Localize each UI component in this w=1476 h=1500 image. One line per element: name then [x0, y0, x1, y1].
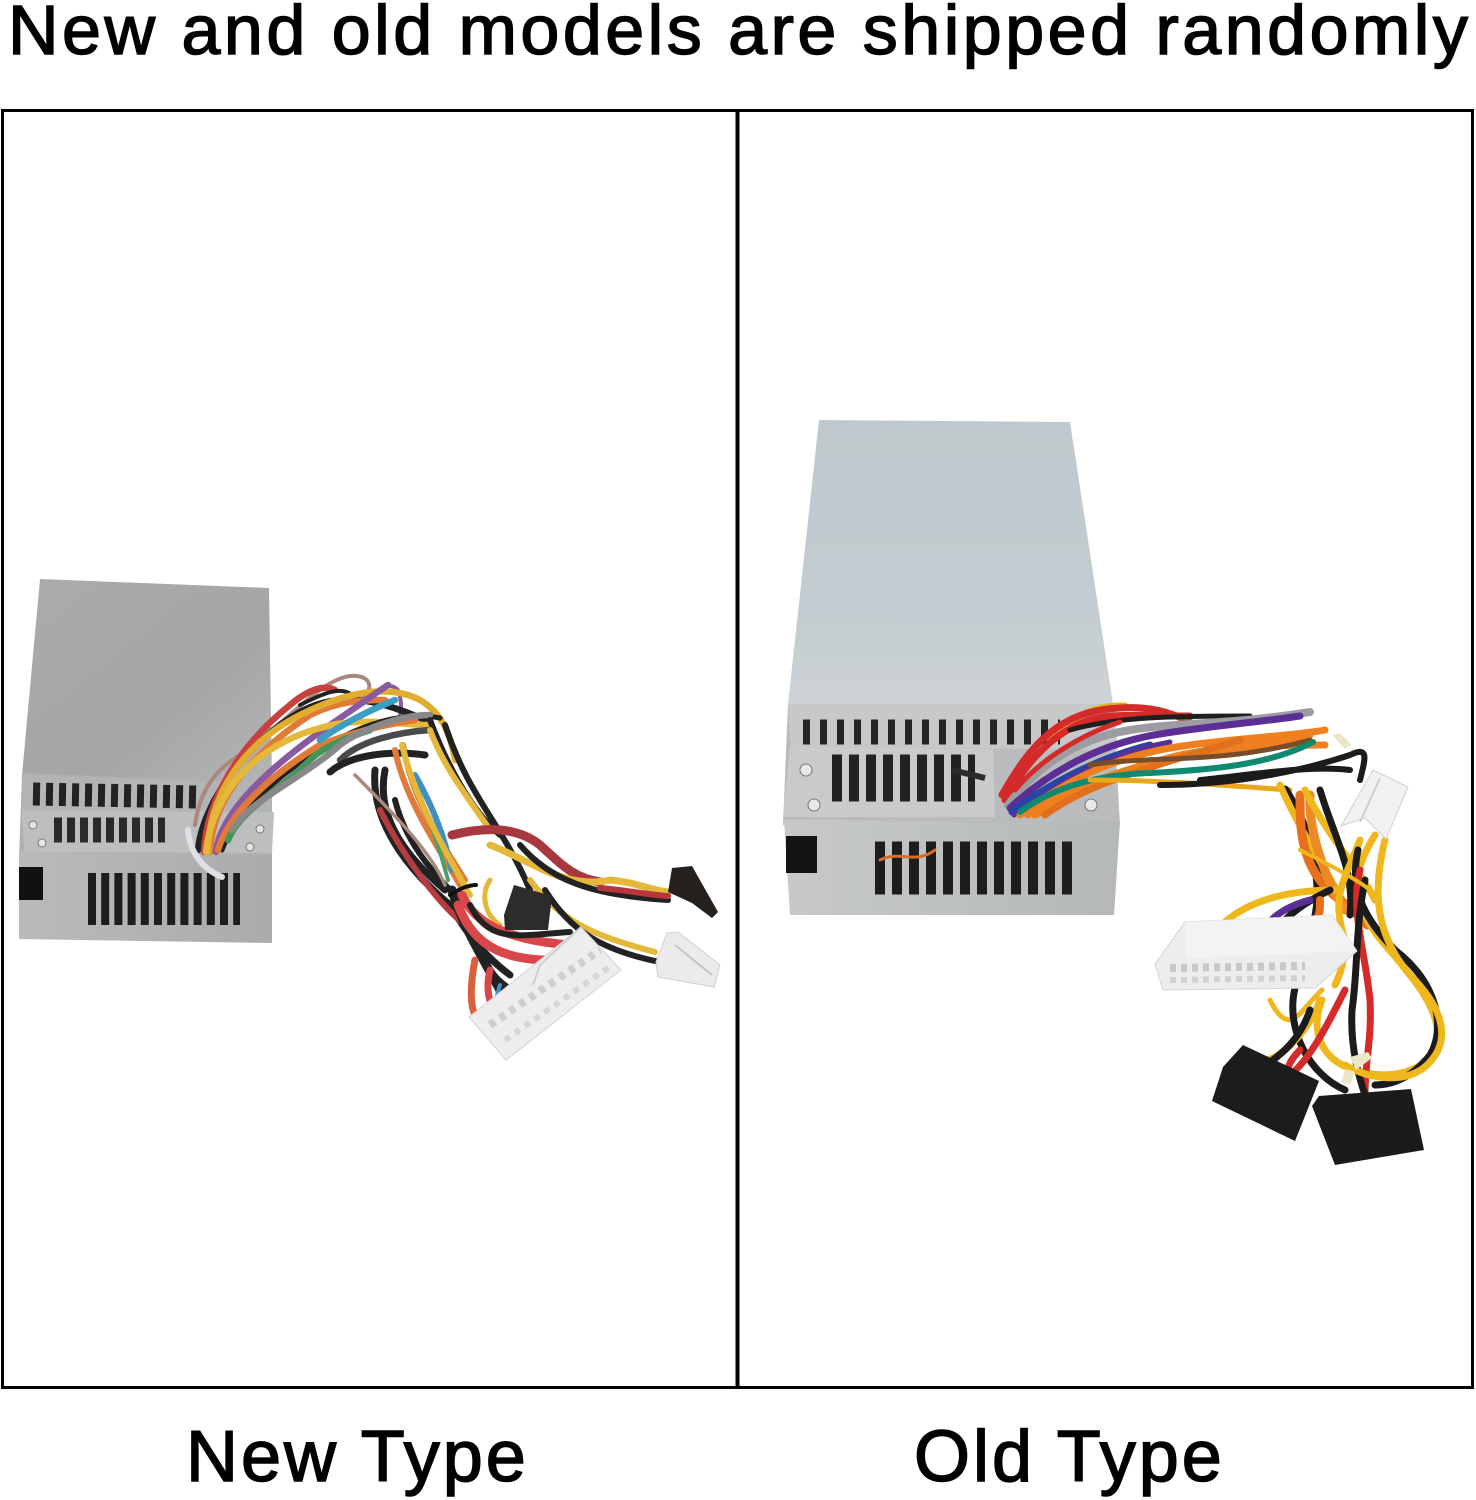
- panel: old type power supply: [783, 420, 1442, 1165]
- label: new type: New Type: [186, 1417, 529, 1497]
- cable tie band: [450, 885, 476, 895]
- panel: new type power supply: [19, 579, 720, 1060]
- power supply body: new type: [19, 579, 274, 943]
- 24-pin connector: new type: [469, 927, 621, 1060]
- label: old type: Old Type: [914, 1417, 1225, 1497]
- white routing tube: [188, 830, 222, 877]
- wire bundle: old type lower: [1225, 785, 1442, 1095]
- wire bundle: new type lower: [355, 720, 668, 1015]
- cable ties: [1332, 733, 1372, 1085]
- 6-pin connector: old type: [1341, 770, 1408, 839]
- power supply body: old type: [783, 420, 1120, 915]
- SATA connector: old type right: [1312, 1089, 1424, 1165]
- 6-pin connector: new type: [656, 932, 720, 987]
- 24-pin connector: old type: [1155, 915, 1357, 990]
- SATA connector: new type middle: [504, 885, 552, 930]
- wire bundle: new type upper: [195, 676, 455, 852]
- SATA connector: old type left: [1212, 1045, 1319, 1141]
- SATA connector: new type small: [668, 866, 718, 918]
- wire bundle: old type upper: [1002, 706, 1364, 815]
